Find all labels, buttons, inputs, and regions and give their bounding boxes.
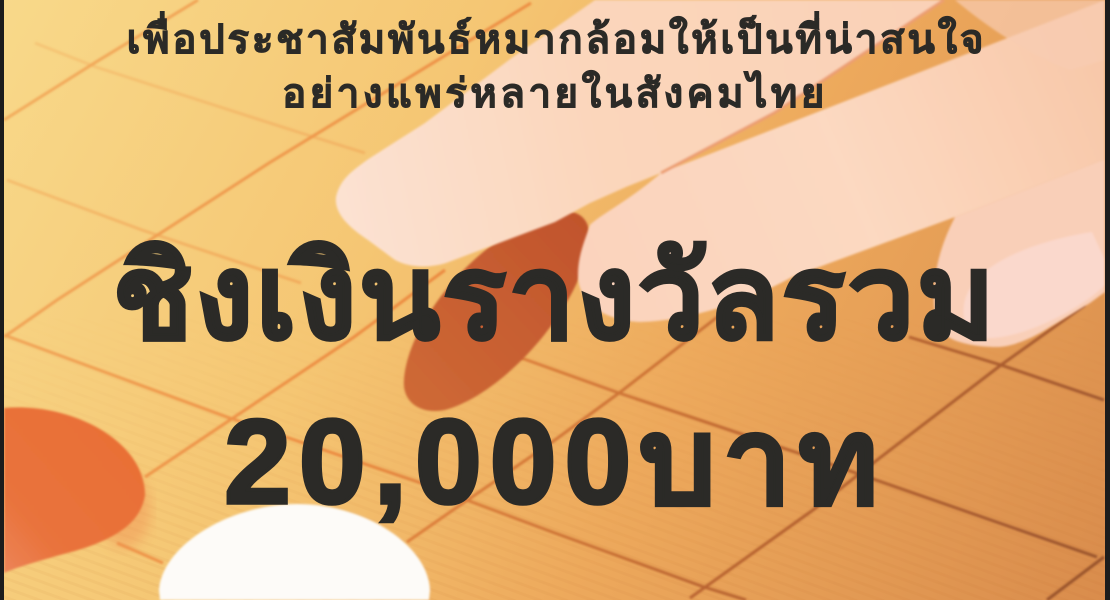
headline: prize: ชิงเงินรางวัลรวม: [113, 232, 997, 364]
headline: amount: 20,000บาท: [224, 395, 886, 529]
red stone left: [4, 407, 151, 573]
subtitle text: [127, 11, 986, 116]
red stone held under finger: [404, 211, 590, 411]
subtitle text: เพื่อประชาสัมพันธ์หมากล้อมให้เป็นที่น่าสนใจ: [127, 18, 986, 62]
dark left edge: [0, 0, 4, 600]
subtitle text: อย่างแพร่หลายในสังคมไทย: [282, 72, 828, 116]
dark right edge: [1105, 0, 1110, 600]
white stone: [159, 504, 430, 600]
fingers: [336, 0, 1105, 347]
